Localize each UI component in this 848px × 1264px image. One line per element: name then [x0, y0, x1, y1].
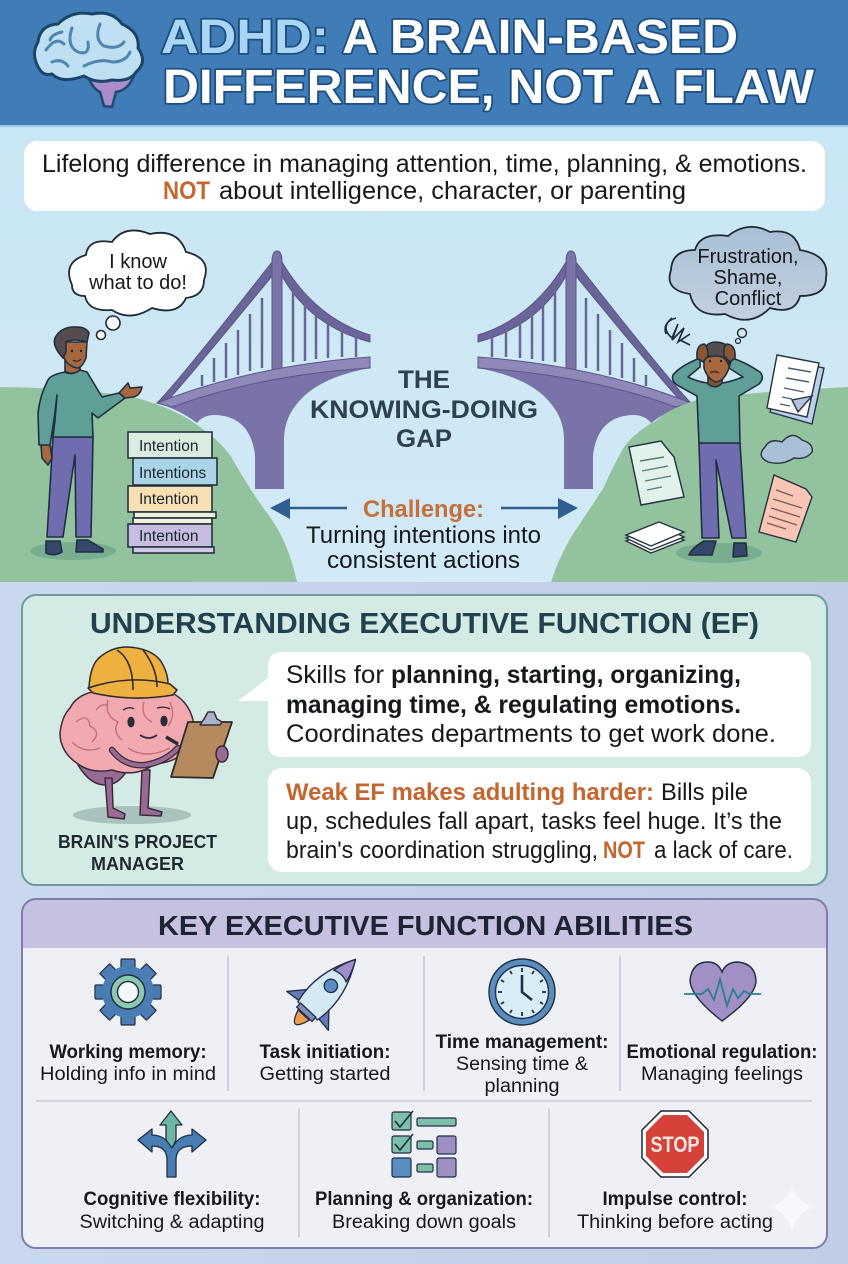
caption: brain's project manager: BRAIN'S PROJECT [58, 832, 217, 852]
intro text box: Lifelong difference in managing attention, time, planning, & emotions. [42, 150, 807, 178]
item: impulse control [577, 1111, 773, 1233]
intro text box: about intelligence, character, or parenting [219, 177, 686, 205]
heading: the knowing-doing gap: THE [398, 366, 450, 394]
item: cognitive flexibility: Cognitive flexibility: [84, 1189, 260, 1210]
scribble: stress [665, 318, 690, 345]
icon: small storm cloud [761, 435, 812, 463]
callout: weak executive function: a lack of care. [654, 837, 793, 864]
left hill [0, 387, 297, 582]
icon: rocket [274, 940, 376, 1043]
caption: brain's project manager [58, 832, 217, 874]
challenge text [306, 496, 541, 574]
item: working memory [40, 959, 216, 1085]
thought bubble: I know what to do: I know [109, 251, 167, 273]
scene: the knowing-doing gap [0, 127, 848, 582]
title: A BRAIN-BASED [342, 11, 738, 64]
callout: weak executive function [268, 768, 811, 872]
item: emotional regulation: Managing feelings [641, 1064, 803, 1085]
challenge text: Challenge: [363, 496, 484, 523]
item: emotional regulation: Emotional regulation: [626, 1042, 818, 1063]
icon: pink document [759, 475, 812, 542]
thought bubble: I know what to do [69, 230, 206, 340]
callout: definition of executive function [238, 652, 811, 757]
callout: definition of executive function: planning, starting, organizing, [391, 661, 741, 689]
heading: the knowing-doing gap [310, 366, 538, 453]
challenge text: Turning intentions into [306, 522, 541, 549]
thought cloud: frustration, shame, conflict [670, 227, 826, 344]
right bridge [478, 251, 691, 489]
icon: clock [489, 959, 555, 1025]
arrow: left [270, 498, 347, 519]
title: DIFFERENCE, NOT A FLAW [163, 61, 815, 114]
caption: brain's project manager: MANAGER [91, 854, 184, 874]
book stack: intentions: Intention [139, 438, 198, 455]
item: time management [436, 959, 608, 1097]
callout: weak executive function: brain's coordination struggling, [286, 837, 598, 864]
item: planning and organization: Breaking down goals [332, 1212, 516, 1233]
item: working memory: Holding info in mind [40, 1064, 216, 1085]
icon: sparkle watermark [768, 1183, 816, 1232]
item: impulse control: Thinking before acting [577, 1212, 773, 1233]
callout: definition of executive function: managing time, & regulating emotions. [286, 691, 741, 719]
item: impulse control: Impulse control: [602, 1189, 748, 1210]
panel: understanding executive function [22, 595, 827, 885]
left bridge [157, 251, 370, 489]
icon: gear [95, 959, 161, 1025]
item: task initiation [260, 940, 390, 1085]
book stack: intentions: Intention [139, 491, 198, 508]
challenge text: consistent actions [327, 547, 520, 574]
item: time management: Time management: [436, 1032, 608, 1053]
book stack: intentions: Intention [139, 528, 198, 545]
heading: the knowing-doing gap: GAP [396, 425, 452, 453]
icon: document [629, 441, 684, 505]
item: task initiation: Getting started [260, 1064, 390, 1085]
callout: weak executive function: Bills pile [661, 779, 748, 806]
thought cloud: frustration, shame, conflict: Shame, [714, 267, 782, 289]
item: planning and organization: Planning & organization: [315, 1189, 533, 1210]
header banner [0, 0, 848, 127]
callout: definition of executive function: Coordinates departments to get work done. [286, 720, 776, 748]
icon: heart with pulse [684, 962, 761, 1021]
title [161, 11, 815, 114]
icon: checklist paper [767, 355, 824, 424]
callout: definition of executive function: Skills for [286, 661, 384, 689]
item: task initiation: Task initiation: [260, 1042, 390, 1063]
icon: header brain [34, 13, 143, 107]
item: cognitive flexibility [80, 1111, 264, 1233]
person: confident figure [30, 327, 142, 560]
icon: stop sign [642, 1111, 708, 1177]
item: time management: planning [484, 1076, 560, 1097]
title: ADHD: [161, 11, 329, 64]
callout: weak executive function: up, schedules fall apart, tasks feel huge. It’s the [286, 808, 782, 835]
icon: branching arrows [138, 1111, 206, 1177]
intro text box: NOT [163, 177, 210, 205]
callout: weak executive function: NOT [603, 837, 645, 864]
thought bubble: I know what to do: what to do! [88, 272, 187, 294]
thought cloud: frustration, shame, conflict: Conflict [715, 288, 782, 310]
icon: stop sign: STOP [650, 1132, 700, 1157]
panel: key executive function abilities [22, 899, 827, 1248]
item: time management: Sensing time & [456, 1054, 588, 1075]
book stack: intentions: Intentions [139, 465, 206, 482]
item: emotional regulation [626, 962, 818, 1085]
heading: key executive function abilities: KEY EXECUTIVE FUNCTION ABILITIES [158, 910, 693, 941]
callout: weak executive function: Weak EF makes adulting harder: [286, 779, 654, 806]
page background [0, 582, 848, 1264]
arrow: right [501, 498, 578, 519]
heading: the knowing-doing gap: KNOWING-DOING [310, 396, 538, 424]
person: overwhelmed figure [672, 342, 762, 563]
item: cognitive flexibility: Switching & adapting [80, 1212, 264, 1233]
right hill [551, 387, 848, 582]
item: planning and organization [315, 1111, 533, 1233]
book stack: intentions [128, 432, 217, 553]
intro text box [24, 141, 825, 211]
icon: checklist grid [392, 1111, 456, 1177]
icon: paper stack [626, 522, 684, 553]
icon: brain project manager mascot [60, 647, 232, 824]
item: working memory: Working memory: [50, 1042, 206, 1063]
thought cloud: frustration, shame, conflict: Frustration, [697, 246, 799, 268]
heading: understanding executive function: UNDERSTANDING EXECUTIVE FUNCTION (EF) [90, 608, 759, 640]
